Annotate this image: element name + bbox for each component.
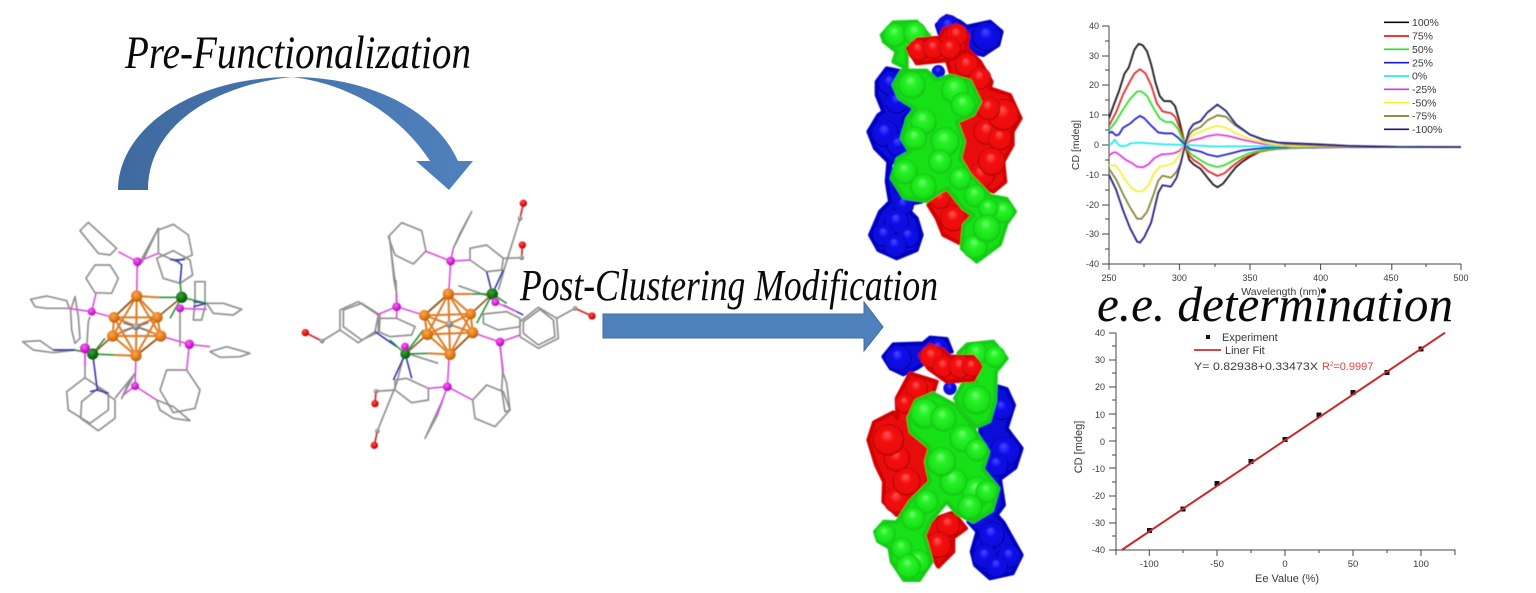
space-filling model: lower enantiomer: [868, 338, 1022, 580]
calibration y tick labels: -30: [1092, 518, 1105, 528]
calibration legend: 2: [1330, 362, 1334, 368]
spectra curves: [1109, 44, 1461, 243]
line chart: CD spectra: [1070, 17, 1469, 298]
line chart: CD versus ee calibration: [1073, 328, 1455, 585]
calibration x tick labels: [1140, 559, 1429, 570]
heading: Post-Clustering Modification: Post-Clustering Modification: [519, 261, 938, 310]
y axis tick labels: [1086, 21, 1099, 269]
calibration x tick labels: -50: [1210, 559, 1224, 570]
legend: 0%: [1412, 70, 1427, 82]
calibration axes: [1109, 333, 1455, 556]
x axis tick labels: 250: [1101, 273, 1117, 283]
legend: -100%: [1412, 124, 1442, 136]
calibration y tick labels: [1092, 328, 1105, 555]
y axis tick labels: 10: [1089, 110, 1099, 120]
calibration x tick labels: 100: [1413, 559, 1429, 570]
y axis tick labels: 30: [1089, 51, 1099, 61]
calibration legend: [1194, 332, 1373, 373]
calibration x axis title: Ee Value (%): [1255, 573, 1319, 585]
calibration x tick labels: -100: [1140, 559, 1159, 570]
x axis tick labels: 400: [1313, 273, 1328, 283]
legend: 25%: [1412, 58, 1433, 70]
calibration x tick labels: 50: [1348, 559, 1358, 570]
calibration legend: =0.9997: [1333, 361, 1373, 373]
y axis tick labels: 20: [1089, 80, 1099, 90]
calibration y axis title: CD [mdeg]: [1073, 421, 1085, 473]
y axis tick labels: 0: [1094, 140, 1099, 150]
calibration legend: Y= 0.82938+0.33473X: [1194, 361, 1319, 373]
calibration y tick labels: -20: [1092, 491, 1105, 501]
calibration y tick labels: 40: [1095, 328, 1105, 338]
legend: [1384, 17, 1442, 136]
legend: -25%: [1412, 84, 1437, 96]
legend: 100%: [1412, 17, 1439, 29]
legend: -75%: [1412, 110, 1437, 122]
y axis tick labels: 40: [1089, 21, 1099, 31]
linear fit line: [1122, 333, 1445, 550]
calibration y tick labels: -40: [1092, 545, 1105, 555]
y axis tick labels: -20: [1086, 200, 1099, 210]
calibration y tick labels: 0: [1100, 437, 1105, 447]
calibration y tick labels: -10: [1092, 464, 1105, 474]
calibration y tick labels: 30: [1095, 355, 1105, 365]
heading: Pre-Functionalization: Pre-Functionalization: [124, 27, 471, 79]
molecule: metal cluster before functionalization: [23, 222, 250, 431]
y axis tick labels: -40: [1086, 259, 1099, 269]
x axis tick labels: 450: [1383, 273, 1399, 283]
legend: 50%: [1412, 44, 1433, 56]
x axis tick labels: 500: [1453, 273, 1469, 283]
experimental points: [1147, 346, 1424, 533]
space-filling model: upper enantiomer: [868, 15, 1021, 262]
x axis tick labels: 350: [1242, 273, 1258, 283]
calibration legend: Experiment: [1222, 332, 1278, 344]
straight arrow: post-clustering modification: [603, 302, 883, 351]
y axis tick labels: -30: [1086, 229, 1099, 239]
molecule: functionalized cluster with aldehyde groups: [302, 200, 596, 449]
calibration y tick labels: 10: [1095, 410, 1105, 420]
x axis tick labels: [1101, 273, 1469, 283]
legend: -50%: [1412, 98, 1437, 110]
x axis tick labels: 300: [1172, 273, 1187, 283]
curved arrow: pre-functionalization: [118, 77, 473, 190]
calibration y tick labels: 20: [1095, 382, 1105, 392]
y axis tick labels: -10: [1086, 170, 1099, 180]
calibration x tick labels: 0: [1282, 559, 1288, 570]
x axis title: Wavelength (nm): [1241, 286, 1321, 298]
heading: e.e. determination: e.e. determination: [1097, 276, 1453, 332]
y axis title: CD [mdeg]: [1070, 120, 1082, 170]
calibration legend: R: [1322, 361, 1330, 373]
chart axes: [1102, 26, 1461, 270]
legend: 75%: [1412, 30, 1433, 42]
calibration legend: Liner Fit: [1225, 345, 1265, 357]
